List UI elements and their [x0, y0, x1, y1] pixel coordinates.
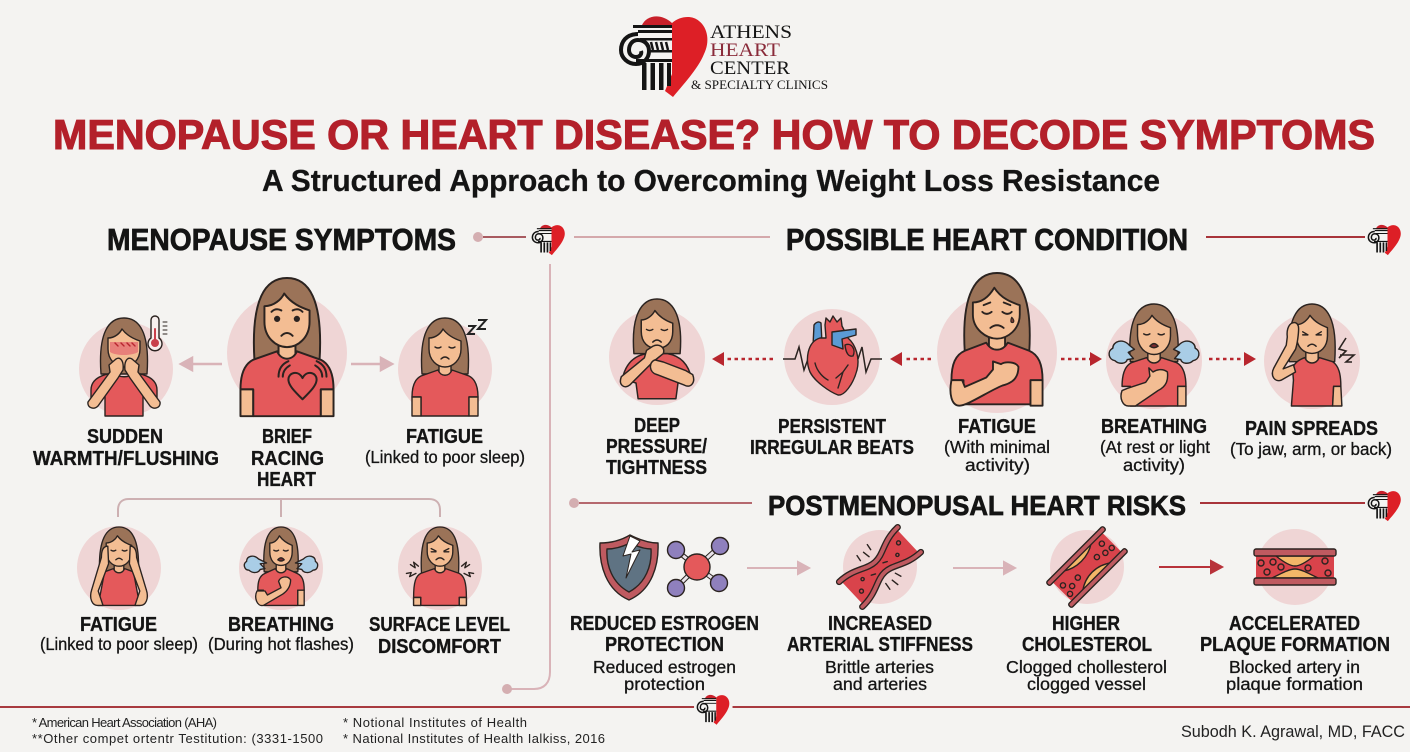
label: [365, 426, 525, 467]
icon: woman holding head: [77, 526, 161, 610]
logo wordmark: ATHENS: [710, 22, 792, 43]
item: fatigue with minimal activity: [937, 273, 1057, 475]
icon: molecule: [668, 538, 728, 596]
footnotes right: * Notional Institutes of Health: [343, 715, 527, 730]
arrow: to fatigue: [351, 358, 392, 370]
label: Blocked artery in: [1229, 657, 1360, 677]
label: [570, 613, 759, 694]
label: DISCOMFORT: [378, 636, 501, 658]
arrow: to plaque formation: [1159, 561, 1222, 573]
section connector lines: [473, 232, 1365, 694]
label: clogged vessel: [1027, 674, 1146, 694]
label: INCREASED: [828, 613, 932, 635]
label: Clogged chollesterol: [1006, 657, 1167, 677]
panel: menopause symptoms: [33, 223, 525, 658]
item: surface level discomfort: [369, 526, 510, 658]
arrow: to arterial stiffness: [747, 562, 809, 574]
item: reduced estrogen protection: [570, 535, 759, 694]
footnotes left: **Other compet ortentr Testitution: (3331-1500: [32, 731, 323, 746]
label: activity): [965, 455, 1030, 475]
label: ACCELERATED: [1229, 613, 1360, 635]
icon: frowning woman with sparks: [398, 526, 482, 610]
label: CHOLESTEROL: [1022, 634, 1152, 656]
icon: woman clutching chest: [609, 299, 705, 405]
item: deep pressure: [606, 299, 707, 479]
label: BREATHING: [228, 614, 334, 636]
icon: woman holding jaw with pain bolt: [1264, 304, 1360, 409]
panel: postmenopausal heart risks: [570, 490, 1390, 694]
label: [787, 613, 973, 694]
label: [208, 614, 354, 654]
label: SUDDEN: [87, 426, 163, 448]
label: [251, 426, 324, 491]
label: Reduced estrogen: [593, 657, 736, 677]
label: BRIEF: [262, 426, 312, 448]
label: DEEP: [634, 415, 680, 437]
item: increased arterial stiffness: [787, 521, 973, 694]
label: PLAQUE FORMATION: [1200, 634, 1390, 656]
label: (Linked to poor sleep): [40, 634, 198, 654]
item: breathing lower: [208, 526, 354, 654]
label: HEART: [257, 469, 316, 491]
logo wordmark: & SPECIALTY CLINICS: [691, 78, 828, 92]
label: [606, 415, 707, 479]
footnotes left: * American Heart Association (AHA): [32, 715, 217, 730]
icon: anatomical heart with ECG: [783, 309, 882, 405]
tree connector: [118, 499, 440, 517]
item: fatigue lower: [40, 526, 198, 654]
icon: sleepy woman: [398, 318, 492, 416]
icon: blocked artery: [1254, 529, 1336, 605]
icon: woman flushing with thermometer: [79, 316, 173, 416]
footer logo: [694, 693, 733, 725]
label: SURFACE LEVEL: [369, 614, 510, 636]
arrow: dotted to irregular beats: [890, 352, 931, 366]
footnotes left: [32, 715, 323, 746]
heading: possible heart condition: POSSIBLE HEART CONDITION: [786, 223, 1188, 257]
label: (To jaw, arm, or back): [1230, 439, 1392, 459]
label: (Linked to poor sleep): [365, 447, 525, 467]
icon: tearful woman hand on chest: [937, 273, 1057, 413]
label: IRREGULAR BEATS: [750, 437, 914, 459]
label: FATIGUE: [80, 614, 157, 636]
section logo: risks: [1368, 491, 1401, 521]
footer: [0, 693, 1410, 746]
icon: breathless woman: [1106, 304, 1202, 409]
label: PERSISTENT: [778, 416, 886, 438]
logo wordmark: CENTER: [710, 58, 790, 79]
label: HIGHER: [1052, 613, 1120, 635]
panel: possible heart condition: [606, 223, 1392, 479]
label: [1230, 418, 1392, 459]
label: [1200, 613, 1390, 694]
label: [1006, 613, 1167, 694]
arrow: dotted to deep pressure: [712, 352, 773, 366]
arrow: to cholesterol: [953, 562, 1015, 574]
label: PAIN SPREADS: [1245, 418, 1378, 440]
item: persistent irregular beats: [750, 309, 914, 459]
label: [33, 426, 219, 470]
label: [944, 416, 1050, 475]
label: WARMTH/FLUSHING: [33, 448, 219, 470]
item: sudden warmth/flushing: [33, 316, 219, 470]
item: fatigue: [365, 318, 525, 467]
label: BREATHING: [1101, 416, 1207, 438]
label: REDUCED ESTROGEN: [570, 613, 759, 635]
item: pain spreads: [1230, 304, 1392, 459]
item: higher cholesterol: [1006, 526, 1167, 694]
label: Brittle arteries: [825, 657, 934, 677]
icon: breathless woman with puffs: [239, 526, 323, 610]
title: MENOPAUSE OR HEART DISEASE? HOW TO DECODE SYMPTOMS: [53, 111, 1375, 158]
label: (During hot flashes): [208, 634, 354, 654]
logo wordmark: [691, 22, 828, 92]
item: accelerated plaque formation: [1200, 529, 1390, 694]
logo: Athens Heart Center: [621, 16, 828, 97]
section logo: menopause: [532, 225, 565, 255]
label: RACING: [251, 448, 324, 470]
label: FATIGUE: [406, 426, 483, 448]
item: brief racing heart: [227, 278, 347, 491]
label: ARTERIAL STIFFNESS: [787, 634, 973, 656]
icon: woman with racing heart: [227, 278, 347, 416]
heading: menopause symptoms: MENOPAUSE SYMPTOMS: [107, 223, 456, 257]
label: (With minimal: [944, 437, 1050, 457]
label: [40, 614, 198, 654]
footnotes right: [343, 715, 605, 746]
label: PROTECTION: [605, 634, 724, 656]
icon: clogged vessel: [1046, 526, 1128, 608]
heading: postmenopausal heart risks: POSTMENOPUSAL HEART RISKS: [768, 490, 1186, 521]
label: and arteries: [833, 674, 927, 694]
item: breathing at rest: [1100, 304, 1210, 475]
label: (At rest or light: [1100, 437, 1210, 457]
logo mark: [621, 16, 707, 97]
label: FATIGUE: [958, 416, 1036, 438]
section logo: heart condition: [1368, 225, 1401, 255]
logo wordmark: HEART: [710, 40, 780, 61]
label: [369, 614, 510, 658]
label: [1100, 416, 1210, 475]
label: protection: [624, 674, 705, 694]
subtitle: A Structured Approach to Overcoming Weight Loss Resistance: [262, 163, 1160, 198]
arrow: dotted to pain spreads: [1209, 352, 1256, 366]
label: [750, 416, 914, 459]
icon: cracked shield: [600, 535, 658, 600]
arrow: to flushing: [181, 358, 222, 370]
label: plaque formation: [1226, 674, 1363, 694]
label: activity): [1123, 455, 1185, 475]
label: PRESSURE/: [606, 436, 707, 458]
author credit: Subodh K. Agrawal, MD, FACC: [1181, 722, 1405, 741]
label: TIGHTNESS: [606, 457, 707, 479]
icon: stiff artery: [834, 521, 926, 613]
arrow: dotted to breathing: [1061, 352, 1102, 366]
footnotes right: * National Institutes of Health Ialkiss, 2016: [343, 731, 605, 746]
